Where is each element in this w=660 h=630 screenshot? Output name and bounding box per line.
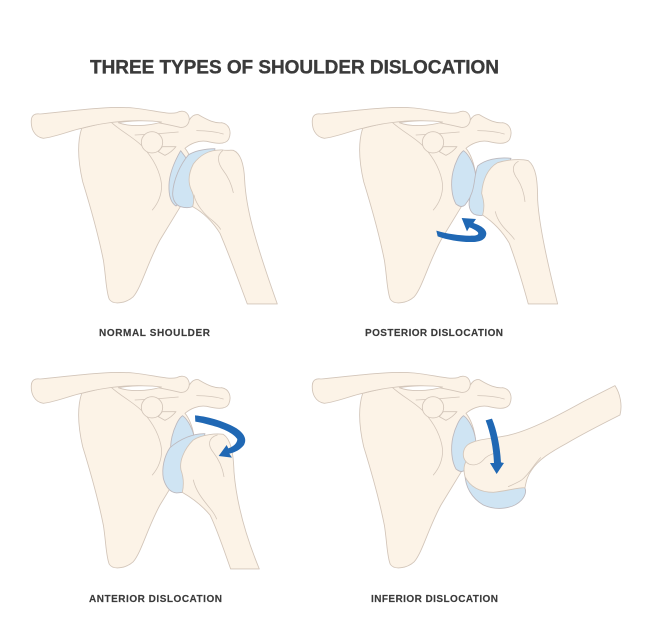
title: THREE TYPES OF SHOULDER DISLOCATION xyxy=(90,58,499,78)
diagram: inferior shoulder joint xyxy=(312,372,621,568)
arrow xyxy=(436,218,486,242)
panel: normal shoulder xyxy=(31,107,277,339)
label: POSTERIOR DISLOCATION xyxy=(365,328,503,339)
label: ANTERIOR DISLOCATION xyxy=(89,594,222,605)
diagram: posterior shoulder joint xyxy=(312,107,558,304)
label: INFERIOR DISLOCATION xyxy=(371,594,498,605)
panel: inferior dislocation xyxy=(312,372,621,605)
arrow xyxy=(195,415,245,458)
label: NORMAL SHOULDER xyxy=(99,328,211,339)
arrow xyxy=(486,419,504,474)
panel: posterior dislocation xyxy=(312,107,558,339)
diagram: anterior shoulder joint xyxy=(31,372,259,569)
panel: anterior dislocation xyxy=(31,372,259,605)
diagram: normal shoulder joint xyxy=(31,107,277,304)
